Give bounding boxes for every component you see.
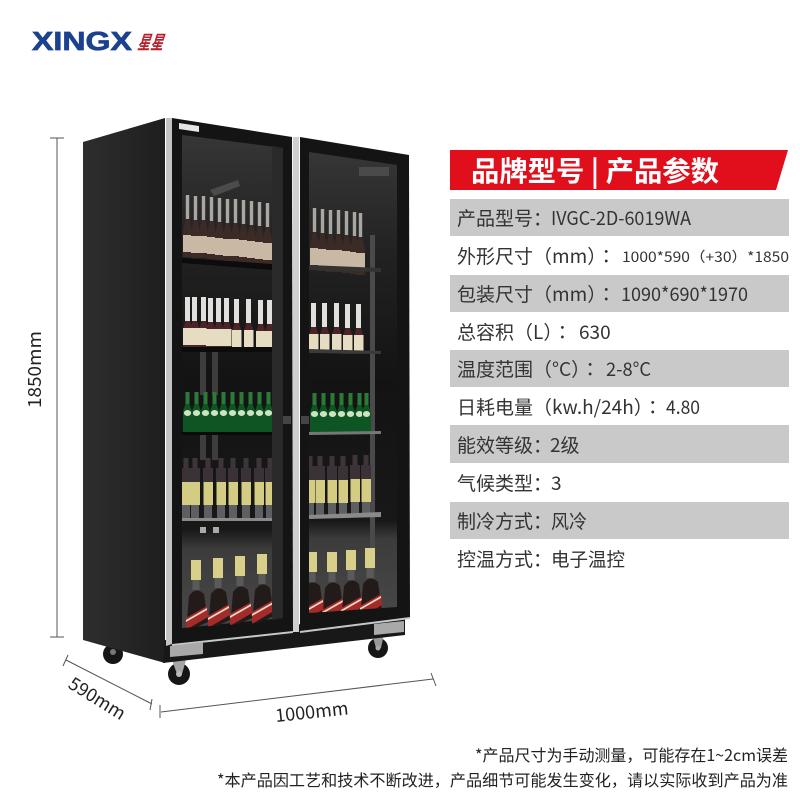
footnotes: [217, 742, 788, 791]
wheel front left: [168, 660, 190, 685]
footnote 2: *本产品因工艺和技术不断改进，产品细节可能发生变化，请以实际收到产品为准: [217, 767, 788, 791]
dimension: depth 590mm: [63, 655, 152, 726]
logo red calligraphy: 星: [136, 32, 155, 54]
row: outer size: 外形尺寸（mm）：: [457, 242, 616, 269]
logo: [32, 26, 168, 56]
left inner frame tint: [272, 146, 283, 620]
wine rack shape: [210, 180, 240, 196]
row: efficiency: [450, 425, 789, 463]
refrigerator: [83, 118, 410, 685]
dimension: height 1850mm: 1850mm: [21, 331, 47, 408]
display panel: [359, 167, 389, 176]
spec table: [450, 199, 789, 572]
logo red calligraphy: 星: [149, 32, 168, 54]
row: cooling: 风冷: [551, 507, 587, 534]
row: model: 产品型号：: [457, 204, 552, 231]
left glass: [182, 135, 283, 628]
side panel: [83, 118, 165, 663]
row: temperature: [450, 350, 789, 387]
dimension: width 1000mm: [160, 673, 436, 728]
base: [163, 612, 405, 663]
row: outer size: [457, 242, 789, 269]
heading banner: 品牌型号 | 产品参数: [471, 150, 719, 190]
dimension: depth 590mm: 590mm: [64, 670, 131, 726]
right glass: [309, 152, 397, 613]
row: model: IVGC-2D-6019WA: [551, 204, 691, 231]
row: model: [450, 199, 789, 236]
row: control: 电子温控: [551, 545, 625, 572]
center hinges: [283, 416, 309, 424]
hinge plate right: [374, 621, 404, 635]
row: climate: 气候类型：: [457, 469, 552, 496]
footnote 1: *产品尺寸为手动测量，可能存在1~2cm误差: [475, 742, 788, 766]
row: package size: [450, 275, 789, 312]
row: package size: 1090*690*1970: [621, 280, 748, 307]
dimension: width 1000mm: 1000mm: [274, 694, 350, 728]
row: temperature: 2-8°C: [606, 355, 651, 382]
logo wordmark: XINGX: [32, 26, 133, 56]
left door: [166, 118, 293, 646]
row: volume: 630: [579, 318, 611, 345]
left bottles: [181, 180, 275, 632]
right door: [293, 137, 410, 633]
wheel front right: [368, 634, 388, 658]
row: energy use: 日耗电量（kw.h/24h）：: [457, 393, 662, 420]
row: cooling: [450, 502, 789, 539]
row: volume: 总容积（L）：: [457, 318, 572, 345]
row: efficiency: 能效等级：: [457, 431, 552, 458]
row: climate: 3: [551, 469, 562, 496]
row: control: [457, 545, 625, 572]
row: package size: 包装尺寸（mm）：: [457, 280, 616, 307]
row: cooling: 制冷方式：: [457, 507, 552, 534]
row: control: 控温方式：: [457, 545, 552, 572]
door badge: [179, 123, 199, 132]
row: efficiency: 2级: [550, 431, 580, 458]
row: outer size: 1000*590（+30）*1850: [622, 247, 789, 267]
right bottles: [309, 167, 389, 613]
hinge plate left: [170, 642, 203, 657]
logo red calligraphy: [136, 32, 168, 54]
wheels rear: [103, 644, 123, 664]
row: temperature: 温度范围（°C）：: [457, 355, 600, 382]
row: energy use: 4.80: [666, 393, 700, 420]
dimension: height 1850mm: [21, 138, 64, 637]
